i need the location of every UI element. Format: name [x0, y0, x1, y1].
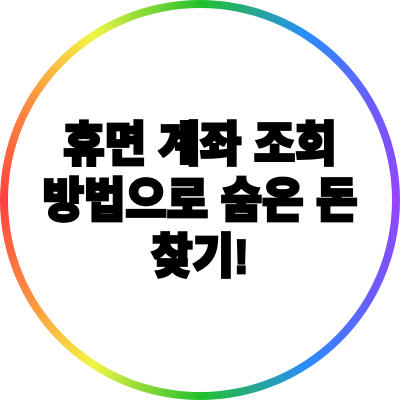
title: [43, 117, 358, 284]
title line 1: 휴면 계좌 조회: [63, 117, 337, 172]
title line 3: 찾기!: [151, 229, 249, 284]
title line 2: 방법으로 숨은 돈: [43, 173, 357, 228]
